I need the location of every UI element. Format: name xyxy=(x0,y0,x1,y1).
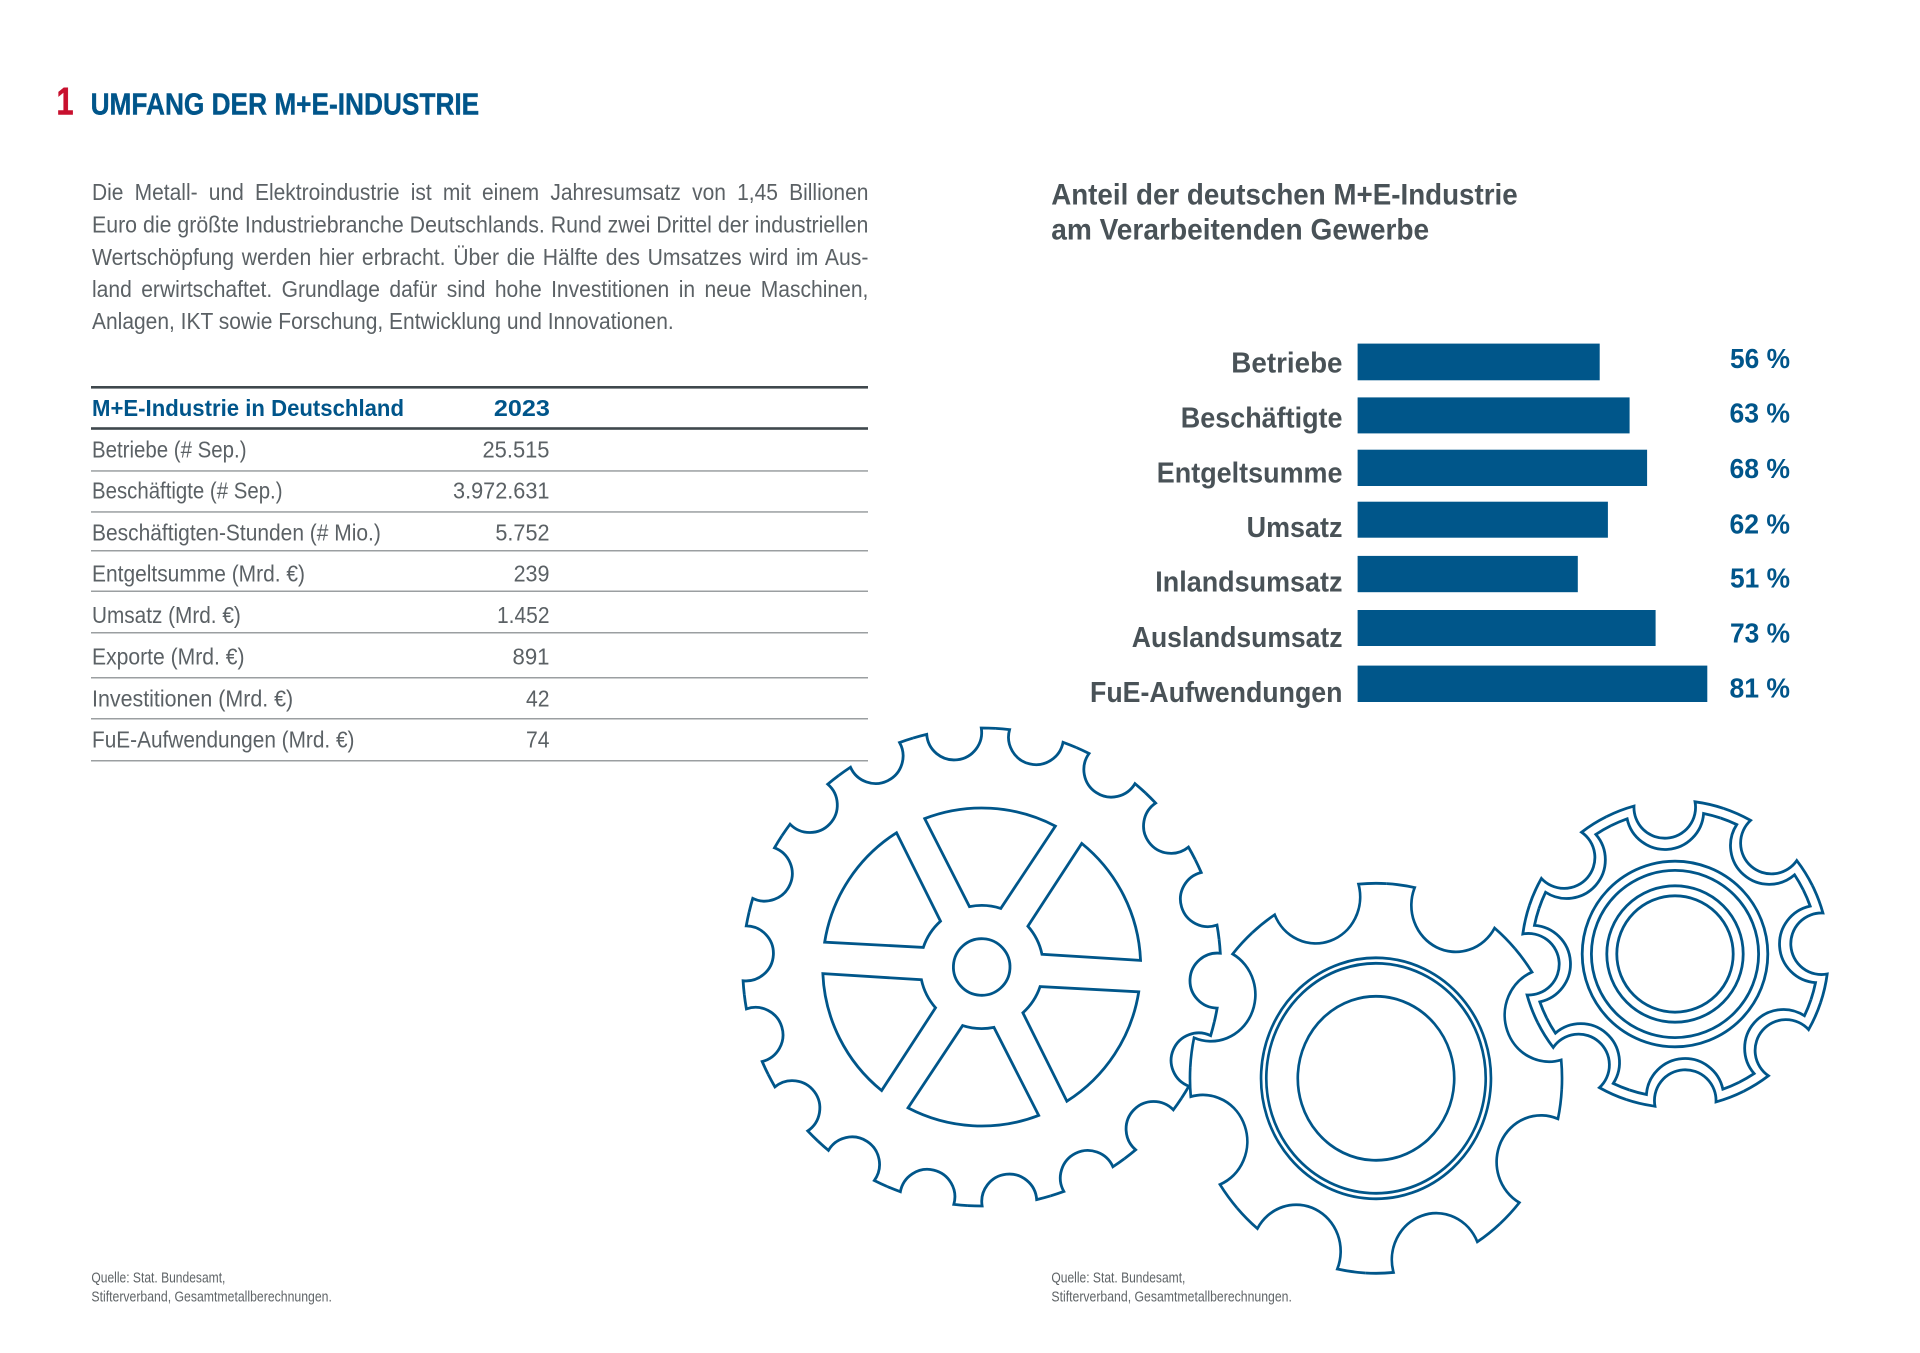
intro paragraph: Wertschöpfung werden hier erbracht. Über die Hälfte des Umsatzes wird im Aus- xyxy=(92,244,868,270)
data table: M+E-Industrie in Deutschland: 5.752 xyxy=(495,520,550,546)
section heading xyxy=(56,80,479,124)
bar: Beschäftigte 63 % xyxy=(1181,397,1790,434)
bar: Umsatz 62 %: 62 % xyxy=(1730,508,1790,539)
data table: M+E-Industrie in Deutschland: 891 xyxy=(512,644,550,670)
bar: Beschäftigte 63 %: 63 % xyxy=(1730,398,1790,428)
data table: M+E-Industrie in Deutschland: FuE-Aufwendungen (Mrd. €) xyxy=(92,726,354,752)
bar: Beschäftigte 63 %: Beschäftigte xyxy=(1181,402,1342,434)
data table: M+E-Industrie in Deutschland: Entgeltsumme (Mrd. €) xyxy=(92,560,305,586)
source note: table: Stifterverband, Gesamtmetallberechnungen. xyxy=(91,1290,332,1306)
chart title: Anteil der deutschen M+E-Industrie xyxy=(1051,178,1518,211)
data table: M+E-Industrie in Deutschland: Investitionen (Mrd. €) xyxy=(92,686,293,712)
bar: Entgeltsumme 68 %: Entgeltsumme xyxy=(1157,458,1342,490)
intro paragraph: Euro die größte Industriebranche Deutschlands. Rund zwei Drittel der industriellen xyxy=(92,212,868,238)
bar: Auslandsumsatz 73 %: Auslandsumsatz xyxy=(1132,622,1342,654)
data table: M+E-Industrie in Deutschland: M+E-Industrie in Deutschland xyxy=(92,395,404,421)
section heading: UMFANG DER M+E-INDUSTRIE xyxy=(91,88,479,122)
data table: M+E-Industrie in Deutschland: 42 xyxy=(526,686,550,712)
data table: M+E-Industrie in Deutschland: 25.515 xyxy=(482,436,550,462)
bar: FuE-Aufwendungen 81 %: 81 % xyxy=(1730,672,1790,704)
bar: Umsatz 62 %: Umsatz xyxy=(1247,512,1342,544)
data table: M+E-Industrie in Deutschland: 3.972.631 xyxy=(453,478,550,504)
bar: Umsatz 62 % xyxy=(1247,502,1790,544)
data table: M+E-Industrie in Deutschland xyxy=(91,386,868,762)
data table: M+E-Industrie in Deutschland: Exporte (Mrd. €) xyxy=(92,644,244,670)
bar: Inlandsumsatz 51 % xyxy=(1155,556,1790,599)
bar: Betriebe 56 % xyxy=(1231,343,1790,380)
source note: chart: Stifterverband, Gesamtmetallberechnungen. xyxy=(1051,1290,1292,1306)
intro paragraph xyxy=(92,179,868,334)
intro paragraph: Die Metall- und Elektroindustrie ist mit einem Jahresumsatz von 1,45 Billionen xyxy=(92,179,868,205)
source note: chart: Quelle: Stat. Bundesamt, xyxy=(1051,1271,1185,1287)
bar: FuE-Aufwendungen 81 %: FuE-Aufwendungen xyxy=(1090,677,1342,709)
bar: Betriebe 56 %: Betriebe xyxy=(1231,348,1342,380)
data table: M+E-Industrie in Deutschland: Beschäftigte (# Sep.) xyxy=(92,478,282,504)
intro paragraph: land erwirtschaftet. Grundlage dafür sind hohe Investitionen in neue Maschinen, xyxy=(92,276,868,302)
bar: Auslandsumsatz 73 %: 73 % xyxy=(1730,618,1790,648)
bar: Betriebe 56 %: 56 % xyxy=(1730,343,1790,374)
icon: large gear with spoked wheel xyxy=(718,701,1245,1233)
bar: Inlandsumsatz 51 %: Inlandsumsatz xyxy=(1155,567,1342,599)
intro paragraph: Anlagen, IKT sowie Forschung, Entwicklung und Innovationen. xyxy=(92,308,674,334)
data table: M+E-Industrie in Deutschland: 2023 xyxy=(494,395,550,421)
bar: Auslandsumsatz 73 % xyxy=(1132,610,1790,654)
bar: Entgeltsumme 68 %: 68 % xyxy=(1730,453,1790,484)
data table: M+E-Industrie in Deutschland: Umsatz (Mrd. €) xyxy=(92,602,241,628)
bar chart: share of manufacturing xyxy=(1090,343,1790,709)
data table: M+E-Industrie in Deutschland: Beschäftigten-Stunden (# Mio.) xyxy=(92,520,381,546)
data table: M+E-Industrie in Deutschland: 1.452 xyxy=(497,602,550,628)
data table: M+E-Industrie in Deutschland: 74 xyxy=(526,726,550,752)
data table: M+E-Industrie in Deutschland: Betriebe (# Sep.) xyxy=(92,436,246,462)
data table: M+E-Industrie in Deutschland: 239 xyxy=(514,560,550,586)
source note: table xyxy=(91,1271,332,1306)
bar: Inlandsumsatz 51 %: 51 % xyxy=(1730,563,1790,594)
bar: Entgeltsumme 68 % xyxy=(1157,450,1790,490)
section heading: 1 xyxy=(56,80,74,124)
icon: medium gear with rings xyxy=(1139,830,1613,1327)
icon: small gear with double outline xyxy=(1440,719,1910,1189)
chart title xyxy=(1051,178,1518,246)
source note: table: Quelle: Stat. Bundesamt, xyxy=(91,1271,225,1287)
chart title: am Verarbeitenden Gewerbe xyxy=(1051,214,1429,246)
source note: chart xyxy=(1051,1271,1292,1306)
bar: FuE-Aufwendungen 81 % xyxy=(1090,666,1790,709)
